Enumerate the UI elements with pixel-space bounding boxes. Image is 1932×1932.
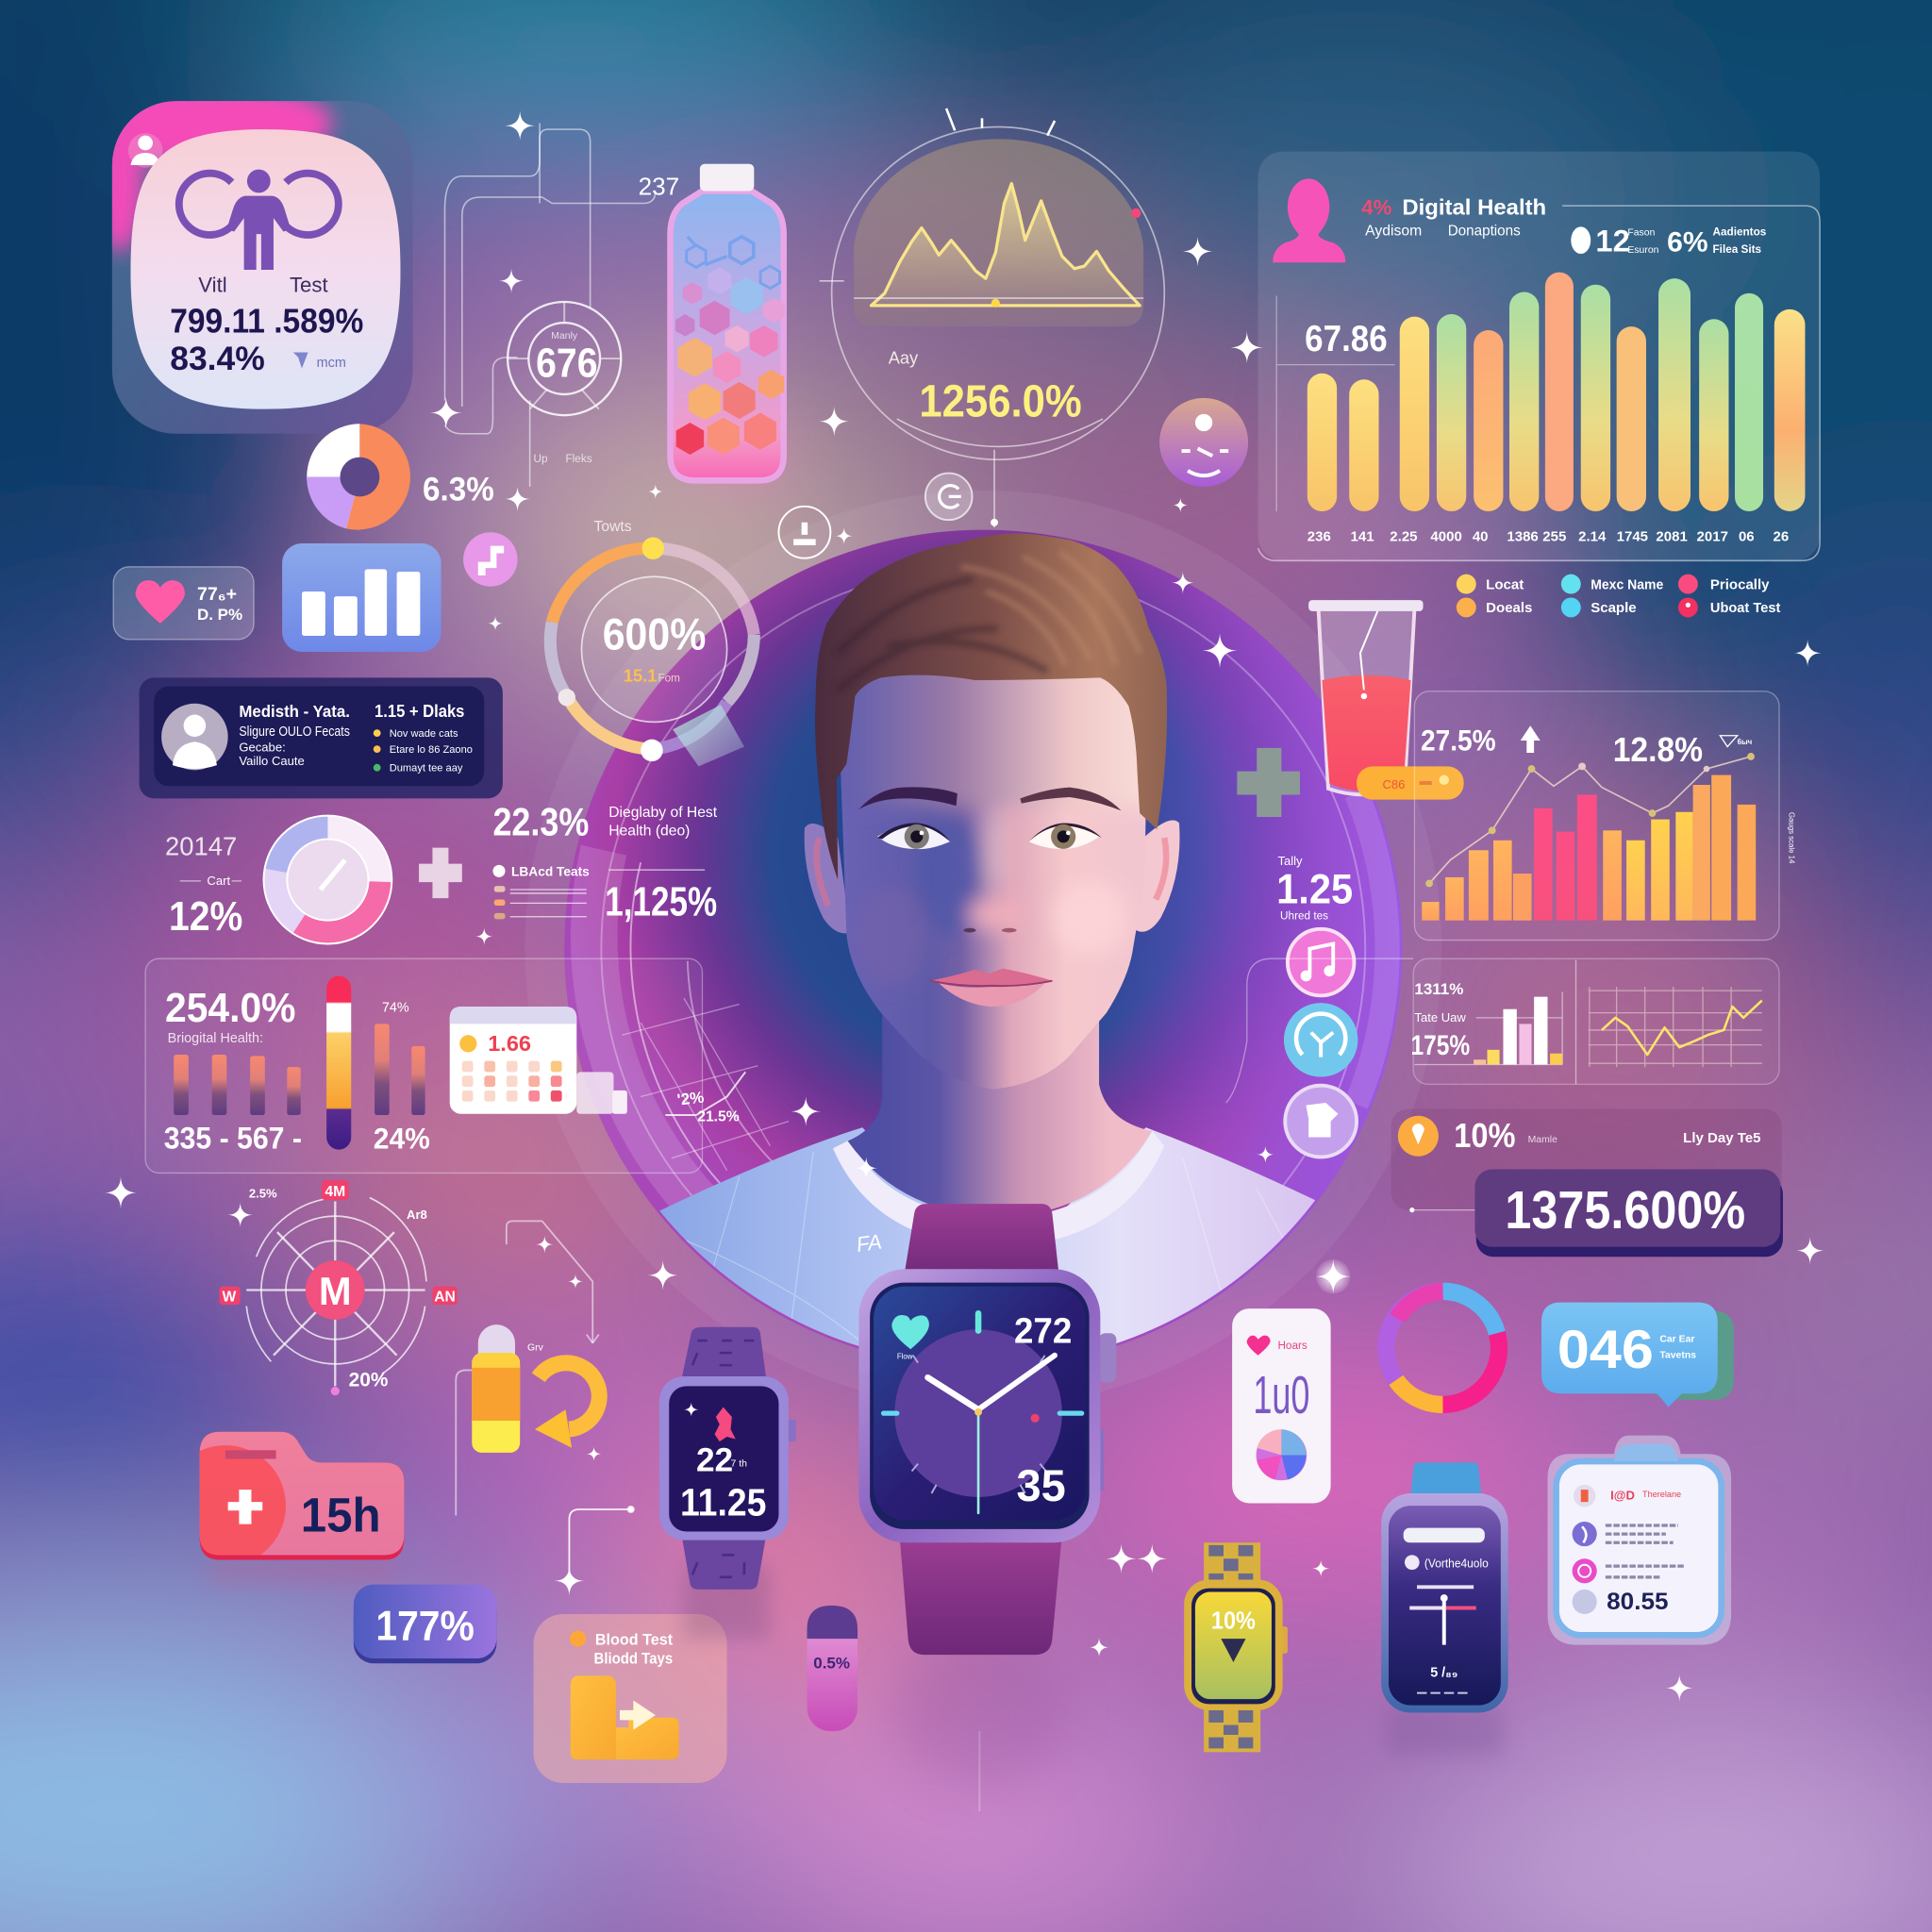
name text: Gecabe: xyxy=(239,741,286,755)
panel: vital test card xyxy=(111,101,413,434)
axis labels: 06 xyxy=(1739,528,1755,544)
dial 12%: Cart xyxy=(207,874,230,888)
axis labels: 2.14 xyxy=(1578,528,1607,544)
list: 1.15 + Dlaks xyxy=(375,701,464,721)
face xyxy=(837,653,1148,1090)
radar labels: W xyxy=(223,1289,237,1305)
heading: Digital Health xyxy=(1402,194,1546,219)
chart note on disc: '2% xyxy=(676,1089,705,1109)
icon: plus right xyxy=(1237,748,1300,817)
axis labels: 4000 xyxy=(1430,528,1462,544)
speech bubble 046 xyxy=(1541,1303,1734,1407)
speech bubble 046: Tavetns xyxy=(1659,1350,1696,1360)
main smartwatch xyxy=(858,1204,1116,1787)
stat block 22.3%: 22.3% xyxy=(492,800,589,844)
value 1256: 1256.0% xyxy=(919,375,1082,426)
clock hands xyxy=(883,1313,1082,1513)
list rows: Therelane xyxy=(1642,1490,1681,1499)
heading: 4% xyxy=(1361,195,1392,219)
brows xyxy=(858,787,958,809)
level pill: C86 xyxy=(1382,777,1405,791)
name text: Sligure OULO Fecats xyxy=(239,724,350,740)
panel: heart stat: 77₆+ xyxy=(197,584,237,605)
tracker device: 5 /₈₉ xyxy=(1430,1666,1457,1681)
stat block 22.3%: 1,125% xyxy=(605,879,717,924)
summary stats xyxy=(1571,223,1767,258)
eyes xyxy=(877,824,950,849)
chart values: 12.8% xyxy=(1613,730,1703,769)
axis labels xyxy=(1307,528,1789,544)
icon: person with loops xyxy=(179,170,339,270)
gauge 676 xyxy=(508,302,621,415)
stat block 22.3% xyxy=(492,800,718,924)
donut ring xyxy=(1386,1291,1499,1405)
calendar icon: 1.66 xyxy=(488,1031,531,1056)
list: Dumayt tee aay xyxy=(390,763,463,774)
axis labels: 2081 xyxy=(1656,528,1688,544)
card: blood test xyxy=(534,1614,727,1783)
card: hearts band xyxy=(1232,1308,1331,1503)
capsule 0.5% xyxy=(808,1606,858,1731)
legend: Doeals xyxy=(1486,600,1532,616)
list: Nov wade cats xyxy=(390,728,458,740)
pill 177%: 177% xyxy=(375,1603,475,1649)
capsule 0.5%: 0.5% xyxy=(813,1654,850,1672)
name text xyxy=(239,702,350,768)
legend: Uboat Test xyxy=(1710,600,1780,616)
axis and value xyxy=(1276,295,1395,511)
radar labels: AN xyxy=(434,1289,456,1305)
circular gauge 600% xyxy=(550,519,754,766)
panel: 254.0% bars and calendar: Briogital Health: xyxy=(168,1031,263,1046)
bar values xyxy=(164,1000,430,1155)
mouth xyxy=(930,969,1052,987)
icon: plus left xyxy=(419,848,462,898)
tracker device: (Vorthe4uolo xyxy=(1424,1556,1489,1570)
tally stat xyxy=(1276,854,1353,922)
card: hearts band: Hoars xyxy=(1277,1340,1307,1352)
summary stats: 12 xyxy=(1595,223,1630,258)
chart note on disc xyxy=(676,1089,740,1125)
stat block 22.3%: LBAcd Teats xyxy=(511,865,590,879)
dial xyxy=(894,1329,1062,1497)
summary stats: Filea Sits xyxy=(1713,243,1762,256)
neck xyxy=(848,1004,1152,1217)
small icon badges near gauge xyxy=(778,474,973,558)
dial 12% xyxy=(165,816,391,943)
bottle with hexagons xyxy=(671,164,789,492)
hair xyxy=(815,533,1167,880)
icon: shirt badge xyxy=(1285,1086,1357,1157)
vital labels xyxy=(198,274,328,297)
heart icon xyxy=(891,1315,929,1349)
radar labels: 4M xyxy=(325,1184,345,1200)
mini bar chart xyxy=(1411,980,1562,1064)
radar labels: Ar8 xyxy=(407,1208,427,1222)
icon: music badge xyxy=(463,532,518,587)
axis labels: 236 xyxy=(1307,528,1331,544)
label 237: 237 xyxy=(639,172,679,200)
icon: gauge xyxy=(1284,1003,1357,1077)
axis labels: 141 xyxy=(1351,528,1374,544)
value box xyxy=(1474,1170,1783,1257)
glass of red drink xyxy=(1308,600,1464,800)
trend line xyxy=(1425,753,1755,887)
circuit lines with 676 gauge xyxy=(445,124,679,487)
heading xyxy=(1361,194,1546,239)
list: Etare lo 86 Zaono xyxy=(390,744,473,756)
axis labels: 26 xyxy=(1774,528,1789,544)
bars xyxy=(1422,775,1756,921)
panel: combo chart xyxy=(1414,691,1795,941)
portrait xyxy=(616,533,1356,1392)
value box: 1375.600% xyxy=(1505,1180,1745,1240)
panel: daily result: Lly Day Te5 xyxy=(1683,1130,1761,1146)
legend: Priocally xyxy=(1710,576,1770,592)
vital values: 83.4% xyxy=(170,341,265,377)
speech bubble 046: Car Ear xyxy=(1659,1334,1694,1344)
legend xyxy=(1457,575,1780,617)
icon: bottle and refresh arrow xyxy=(472,1324,599,1453)
panel: mini charts xyxy=(1411,958,1779,1084)
gauge 676: Manly xyxy=(551,331,578,341)
bar values: 24% xyxy=(374,1122,430,1155)
radar labels: 20% xyxy=(349,1369,389,1391)
connector lines xyxy=(456,1221,979,1811)
dial xyxy=(264,816,391,943)
calendar icon xyxy=(450,1007,627,1114)
dome line chart xyxy=(820,108,1164,527)
icon: user badge xyxy=(128,133,162,168)
dial 12%: 20147 xyxy=(165,831,237,860)
circular gauge 600%: 600% xyxy=(603,608,706,658)
avatar xyxy=(161,704,228,770)
heading: Donaptions xyxy=(1448,223,1521,239)
panel: 254.0% bars and calendar xyxy=(145,958,702,1173)
axis labels: 255 xyxy=(1542,528,1566,544)
nose xyxy=(963,928,975,932)
panel: blue bar icon xyxy=(282,543,441,652)
mini bar chart: 1311% xyxy=(1414,980,1463,998)
panel: digital health bar chart xyxy=(1258,152,1820,560)
face shading xyxy=(841,675,1140,980)
icon column xyxy=(1226,929,1413,1157)
axis labels: 1386 xyxy=(1507,528,1539,544)
bar values: 74% xyxy=(382,1000,409,1015)
circular gauge 600%: 15.1 xyxy=(624,665,657,685)
label aay: Aay xyxy=(889,347,919,367)
summary stats: Aadientos xyxy=(1713,225,1767,238)
vital values: 799.11 .589% xyxy=(170,302,363,341)
axis labels: 1745 xyxy=(1617,528,1648,544)
vital values: mcm xyxy=(317,356,346,371)
main smartwatch: 35 xyxy=(1017,1460,1066,1510)
legend: Scaple xyxy=(1591,600,1637,616)
panel: daily result xyxy=(1391,1109,1783,1257)
chart note on disc: 21.5% xyxy=(697,1109,740,1125)
name text: Vaillo Caute xyxy=(239,754,305,768)
big number: 254.0% xyxy=(165,986,295,1031)
card: blood test: Blood Test xyxy=(595,1631,673,1649)
dial 12%: 12% xyxy=(169,894,242,940)
label up flexes: Up xyxy=(534,453,548,465)
vital values xyxy=(170,302,363,377)
legend: Locat xyxy=(1486,576,1524,592)
vital labels: Vitl xyxy=(198,274,227,297)
stat block 22.3%: Health (deo) xyxy=(608,824,690,840)
panel: medical card xyxy=(140,677,503,798)
watch numbers: 272 xyxy=(1014,1312,1072,1352)
bar values: 335 - 567 - xyxy=(164,1120,302,1155)
icon: bottle and refresh arrow: Grv xyxy=(527,1343,544,1354)
panel: daily result: 10% xyxy=(1454,1116,1516,1155)
panel: daily result: Mamle xyxy=(1528,1135,1557,1145)
list rows: 80.55 xyxy=(1607,1590,1669,1615)
summary stats: Esuron xyxy=(1627,245,1659,256)
panel: heart stat xyxy=(113,567,254,640)
tracker device xyxy=(1381,1462,1508,1756)
yellow watch: 10% xyxy=(1211,1607,1256,1635)
ears xyxy=(805,824,850,933)
axis labels: 40 xyxy=(1473,528,1489,544)
chart values xyxy=(1421,724,1752,769)
small purple watch xyxy=(659,1327,796,1639)
watch readout: 22 xyxy=(696,1442,733,1479)
summary stats: 6% xyxy=(1667,226,1708,258)
panel: heart stat: D. P% xyxy=(197,606,242,624)
folder 15h xyxy=(200,1432,404,1584)
mini bar chart: Tate Uaw xyxy=(1414,1010,1466,1024)
radar labels xyxy=(219,1180,458,1391)
pill 177% xyxy=(354,1585,496,1663)
radar compass xyxy=(219,1180,458,1395)
icon: profile xyxy=(1273,178,1345,262)
watch readout: 7 th xyxy=(731,1458,747,1469)
summary stats: Fason xyxy=(1627,227,1656,238)
thermometer xyxy=(326,975,351,1150)
list rows xyxy=(1573,1485,1686,1615)
yellow watch xyxy=(1184,1542,1288,1752)
radar labels: 2.5% xyxy=(249,1187,277,1201)
watch readout: 11.25 xyxy=(680,1481,766,1524)
level pill xyxy=(1357,766,1464,800)
chart values: 6ыч xyxy=(1738,738,1752,746)
heading: Aydisom xyxy=(1365,223,1422,239)
circular gauge 600%: Fom xyxy=(658,672,680,684)
card: health list xyxy=(1547,1436,1731,1645)
small bars xyxy=(174,1024,425,1115)
main smartwatch: Flow xyxy=(897,1353,913,1361)
radar compass: M xyxy=(319,1269,352,1313)
mini line chart xyxy=(1589,987,1762,1067)
mini bar chart: 175% xyxy=(1411,1030,1470,1061)
tally stat: 1.25 xyxy=(1276,866,1353,912)
card: blood test: Bliodd Tays xyxy=(594,1649,673,1667)
shirt: FA xyxy=(855,1229,883,1257)
chart values: 27.5% xyxy=(1421,724,1496,757)
shirt xyxy=(659,1127,1315,1346)
vital labels: Test xyxy=(290,274,328,297)
stat block 22.3%: Dieglaby of Hest xyxy=(608,805,718,821)
list xyxy=(374,701,473,774)
bars xyxy=(1307,273,1805,511)
axis labels: 2017 xyxy=(1697,528,1728,544)
list rows: I@D xyxy=(1610,1489,1635,1503)
name text: Medisth - Yata. xyxy=(239,702,350,721)
axis and value: 67.86 xyxy=(1305,319,1388,359)
flexes label: Fleks xyxy=(566,453,592,465)
panel: combo chart: Gaugs scale 14 xyxy=(1787,812,1795,864)
icon: people badge xyxy=(1159,398,1248,487)
circular gauge 600%: Towts xyxy=(594,519,632,535)
tally stat: Uhred tes xyxy=(1280,909,1328,922)
card: hearts band: 1u0 xyxy=(1253,1365,1309,1424)
speech bubble 046: 046 xyxy=(1557,1320,1654,1380)
central disc behind portrait xyxy=(525,491,1441,1407)
gauge 676: 676 xyxy=(536,341,597,387)
icon: music xyxy=(1288,929,1354,995)
sparkles xyxy=(105,111,1824,1702)
folder 15h: 15h xyxy=(301,1489,381,1542)
tally stat: Tally xyxy=(1277,854,1303,868)
axis labels: 2.25 xyxy=(1390,528,1418,544)
icon: donut with 6.3% xyxy=(307,424,494,530)
watch readout xyxy=(680,1402,766,1524)
legend: Mexc Name xyxy=(1591,576,1663,592)
icon: donut with 6.3%: 6.3% xyxy=(423,471,494,508)
